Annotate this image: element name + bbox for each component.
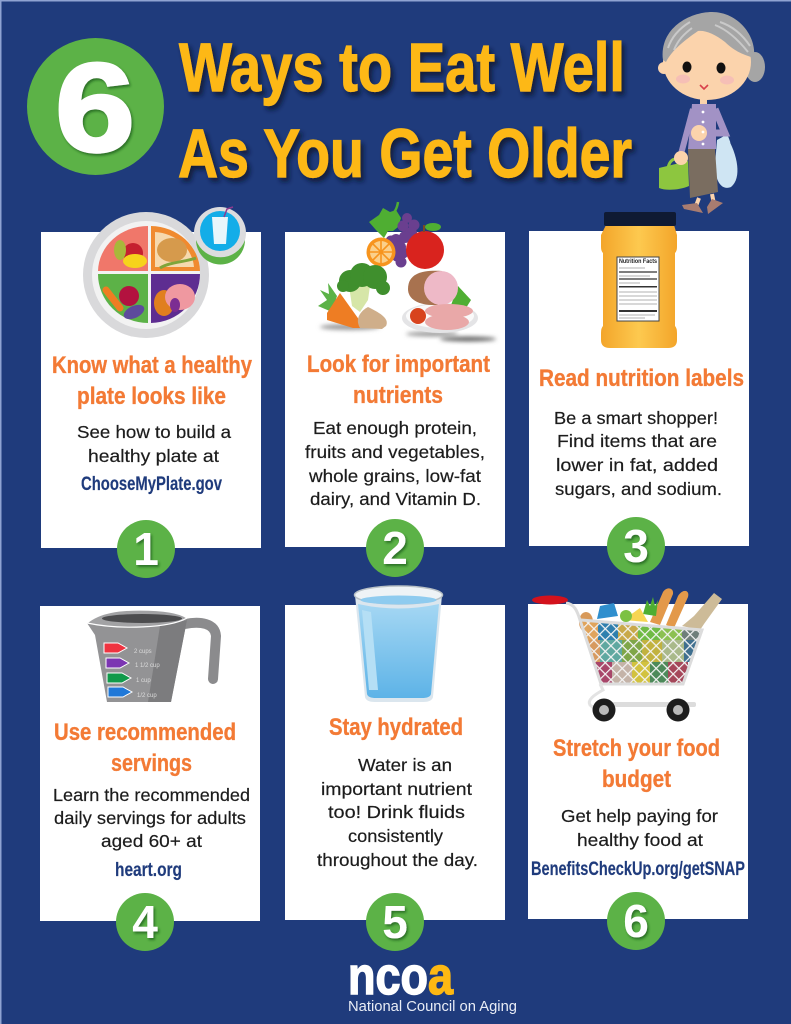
heading: servings [111,750,192,777]
link: ChooseMyPlate.gov [81,474,222,495]
title: Ways to Eat Well [179,29,625,106]
text block: dairy, and Vitamin D. [310,489,481,509]
logo: ncoa National Council on Aging [348,947,517,1015]
text block: Find items that are [557,431,717,451]
icon: plate with food groups [83,212,209,338]
number badge 3: 3 [623,520,649,572]
text block: Be a smart shopper! [554,408,718,428]
text block: healthy plate at [88,446,219,466]
heading: Read nutrition labels [539,365,744,392]
number badge 2: 2 [382,522,408,574]
panel 4: recommended servings [40,606,260,921]
heading [553,735,720,793]
number badge 4 [116,893,174,951]
text block: sugars, and sodium. [555,479,722,499]
text block: Eat enough protein, [313,418,477,438]
icon: older woman with shopping bags [658,12,765,214]
text block: throughout the day. [317,850,478,870]
text block: Learn the recommended [53,785,250,805]
number badge 2 [366,519,424,577]
number badge 1: 1 [133,523,159,575]
icon: measuring cup: 1 1/2 cup [135,663,160,669]
text block: consistently [348,826,443,846]
heading: nutrients [353,382,443,409]
panel 5: stay hydrated [285,586,505,920]
logo: ncoa National Council on Aging: ncoa [348,947,453,1006]
text block: too! Drink fluids [328,802,465,822]
icon: measuring cup [87,610,216,702]
text block: important nutrient [321,779,472,799]
text block: healthy food at [577,830,703,850]
heading: Look for important [307,351,490,378]
heading: Know what a healthy [52,352,253,379]
text block [305,418,485,509]
panel 2: nutrients [285,202,505,547]
number badge 1 [117,520,175,578]
number badge 6 [607,892,665,950]
heading [307,351,490,409]
number 6 badge [27,37,164,178]
text block [53,785,250,851]
panel 1: healthy plate [41,207,261,548]
heading [54,719,236,777]
text block: fruits and vegetables, [305,442,485,462]
text block: daily servings for adults [54,808,246,828]
heading: Use recommended [54,719,236,746]
icon: jar with nutrition facts label [601,212,677,348]
number badge 5 [366,893,424,951]
text block [561,806,718,850]
text block [554,408,722,499]
icon: glass of water [194,207,246,264]
text block [317,755,478,870]
title: As You Get Older [178,115,632,192]
panel 3: nutrition labels [529,212,749,546]
text block [77,422,231,466]
heading: Stretch your food [553,735,720,762]
title [178,29,632,192]
number badge 4: 4 [132,896,158,948]
heading [52,352,253,410]
number badge 6: 6 [623,895,649,947]
heading: plate looks like [77,383,226,410]
icon: measuring cup: 1/2 cup [137,693,157,699]
text block: aged 60+ at [101,831,202,851]
icon: glass of water [354,586,442,702]
number badge 5: 5 [382,896,408,948]
link: heart.org [115,860,182,881]
panel 6: food budget [528,588,748,919]
number badge 3 [607,517,665,575]
text block: Water is an [358,755,452,775]
text block: Get help paying for [561,806,718,826]
text block: See how to build a [77,422,231,442]
icon: fruit, vegetables and meat [318,202,496,342]
icon: jar with nutrition facts label: Nutrition Facts [619,259,658,265]
heading: budget [602,766,671,793]
icon: measuring cup: 2 cups [134,649,152,655]
heading: Stay hydrated [329,714,463,741]
logo: ncoa National Council on Aging: National Council on Aging [348,998,517,1015]
icon: shopping cart with groceries [532,588,722,722]
text block: lower in fat, added [556,455,718,475]
number 6 badge: 6 [55,37,135,178]
icon: measuring cup: 1 cup [136,678,151,684]
text block: whole grains, low-fat [308,466,481,486]
